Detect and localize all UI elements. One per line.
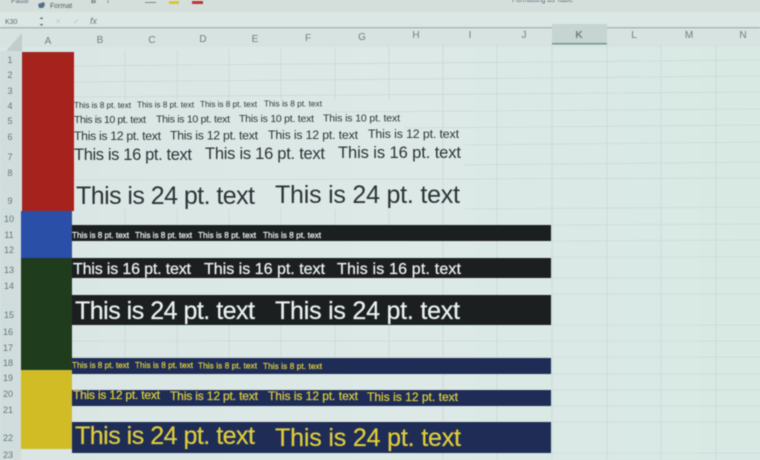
row numbers: 6: [7, 132, 13, 142]
column headers: A: [45, 36, 52, 47]
row: 12 pt dark text on light: This is 12 pt. text: [170, 128, 259, 142]
bar: 12 pt yellow on navy: This is 12 pt. text: [268, 389, 359, 403]
row numbers: 18: [3, 358, 13, 368]
bar: 24 pt yellow on navy: [72, 422, 551, 453]
row numbers: 14: [4, 281, 14, 291]
row: 8 pt dark text on light: This is 8 pt. text: [264, 98, 323, 108]
row: 24 pt dark text on light: This is 24 pt. text: [275, 181, 460, 209]
row: 24 pt dark text on light: [76, 181, 460, 210]
column headers: I: [469, 30, 471, 41]
row numbers: 2: [7, 70, 13, 80]
row numbers: 21: [3, 405, 13, 415]
row numbers: 11: [4, 230, 14, 240]
bar: 8 pt white on black: This is 8 pt. text: [135, 231, 193, 240]
column headers: B: [97, 35, 104, 46]
bar: 8 pt yellow on navy: This is 8 pt. text: [198, 362, 258, 370]
bar: 12 pt yellow on navy: This is 12 pt. text: [73, 388, 161, 402]
column headers: N: [739, 30, 747, 41]
bar: 16 pt white on black: This is 16 pt. text: [73, 261, 192, 278]
row numbers: 10: [4, 214, 14, 224]
row: 10 pt dark text on light: This is 10 pt. text: [323, 112, 400, 124]
row numbers: 3: [7, 86, 13, 96]
row: 8 pt dark text on light: This is 8 pt. text: [74, 100, 132, 110]
bar: 8 pt white on black: This is 8 pt. text: [198, 231, 257, 240]
row: 10 pt dark text on light: This is 10 pt. text: [239, 113, 314, 125]
bar: 24 pt yellow on navy: This is 24 pt. text: [75, 422, 255, 450]
row: 12 pt dark text on light: This is 12 pt. text: [368, 127, 460, 141]
formula bar: ✓: [73, 17, 80, 26]
bar: 8 pt white on black: [72, 225, 551, 241]
bar: 8 pt yellow on navy: This is 8 pt. text: [263, 362, 323, 371]
column headers: G: [358, 32, 366, 43]
row numbers: [0, 51, 21, 460]
bar: 8 pt white on black: This is 8 pt. text: [72, 231, 130, 240]
colour block: green: [21, 258, 72, 370]
bar: 12 pt yellow on navy: This is 12 pt. text: [367, 390, 459, 404]
row numbers: 20: [3, 389, 13, 399]
row numbers: 16: [3, 327, 13, 337]
row: 10 pt dark text on light: This is 10 pt. text: [74, 114, 146, 126]
colour block: yellow: [21, 370, 72, 449]
formula bar: K30: [5, 19, 18, 26]
column headers: H: [412, 30, 420, 41]
column headers: M: [685, 30, 693, 41]
ribbon toolbar: Format: [50, 3, 72, 10]
row: 12 pt dark text on light: This is 12 pt. text: [74, 129, 162, 143]
column headers: L: [631, 30, 637, 41]
row: 24 pt dark text on light: This is 24 pt. text: [76, 182, 255, 210]
colour block: blue: [21, 211, 72, 258]
row: 8 pt dark text on light: This is 8 pt. text: [137, 100, 195, 110]
row numbers: 22: [3, 433, 13, 443]
row numbers: 12: [4, 245, 14, 255]
bar: 24 pt white on black: This is 24 pt. text: [275, 297, 460, 325]
row numbers: 17: [3, 343, 13, 353]
row numbers: 23: [3, 450, 13, 460]
colour block: red: [22, 52, 74, 211]
bar: 8 pt white on black: This is 8 pt. text: [263, 231, 322, 240]
row numbers: 7: [7, 152, 13, 162]
bar: 8 pt yellow on navy: [72, 358, 551, 374]
ribbon toolbar: [0, 0, 760, 12]
column headers: D: [199, 34, 207, 45]
bar: 24 pt white on black: This is 24 pt. text: [75, 297, 255, 325]
column headers: F: [305, 33, 311, 44]
row: 16 pt dark text on light: This is 16 pt. text: [338, 144, 461, 162]
row: 16 pt dark text on light: This is 16 pt. text: [74, 146, 192, 164]
row: 10 pt dark text on light: [74, 112, 400, 126]
row numbers: 4: [7, 101, 13, 111]
row numbers: 13: [4, 265, 14, 275]
row: 16 pt dark text on light: This is 16 pt. text: [205, 145, 325, 163]
row: 16 pt dark text on light: [74, 144, 461, 164]
column headers: J: [522, 30, 526, 41]
row numbers: 8: [7, 168, 13, 178]
column headers: E: [252, 34, 259, 45]
row: 12 pt dark text on light: This is 12 pt. text: [268, 128, 359, 142]
bar: 8 pt yellow on navy: This is 8 pt. text: [72, 361, 130, 370]
bar: 12 pt yellow on navy: [72, 388, 551, 406]
row: 10 pt dark text on light: This is 10 pt. text: [156, 114, 230, 126]
column headers: [0, 24, 760, 51]
bar: 24 pt yellow on navy: This is 24 pt. text: [275, 424, 461, 452]
bar: 24 pt white on black: [72, 295, 551, 325]
formula bar: fx: [90, 16, 98, 26]
row numbers: 19: [3, 373, 13, 383]
row: 8 pt dark text on light: This is 8 pt. text: [200, 99, 258, 109]
formula bar: [0, 12, 760, 29]
row numbers: 15: [4, 310, 14, 320]
formula bar: ×: [56, 17, 61, 26]
column headers: C: [148, 35, 156, 46]
bar: 16 pt white on black: This is 16 pt. text: [337, 261, 462, 278]
column headers: K: [575, 30, 583, 41]
row: 8 pt dark text on light: [74, 98, 323, 110]
row: 12 pt dark text on light: [74, 127, 460, 143]
row numbers: 5: [7, 116, 13, 126]
bar: 12 pt yellow on navy: This is 12 pt. text: [170, 389, 259, 403]
bar: 8 pt yellow on navy: This is 8 pt. text: [135, 361, 194, 370]
row numbers: 1: [7, 55, 13, 65]
row numbers: 9: [7, 196, 13, 206]
bar: 16 pt white on black: [72, 258, 551, 278]
bar: 16 pt white on black: This is 16 pt. text: [204, 261, 326, 278]
